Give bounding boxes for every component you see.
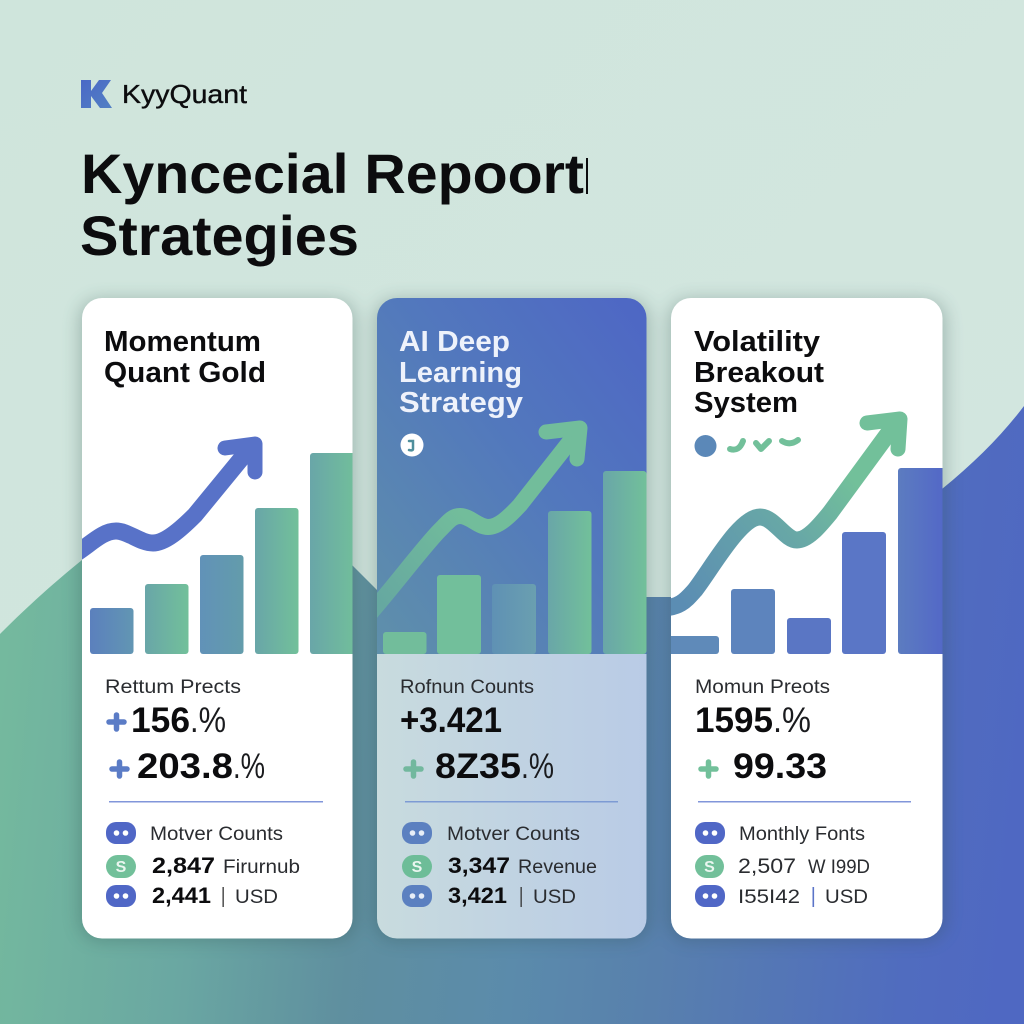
metric row: counts: Motver Counts xyxy=(150,824,283,845)
panel: momentum quant gold xyxy=(72,298,358,938)
stat: second value xyxy=(406,747,554,786)
panel: volatility breakout system xyxy=(660,298,948,938)
metric row: usd: USD xyxy=(235,887,278,908)
bar chart xyxy=(383,471,646,654)
metric row: firurnub: Firurnub xyxy=(223,857,300,878)
icon: badge xyxy=(400,434,424,456)
title: Kyncecial Repoort xyxy=(81,142,584,205)
metric row: w i99d xyxy=(695,855,870,878)
stat: first value xyxy=(695,701,811,740)
icon: dot and squiggles xyxy=(694,435,798,457)
metric row: usd xyxy=(106,883,278,908)
metric row: revenue: Revenue xyxy=(518,857,597,878)
stat label: Rofnun Counts xyxy=(400,677,534,698)
title: Strategies xyxy=(80,204,359,267)
stat label: Momun Preots xyxy=(695,677,830,698)
metric row: usd: 3,421 xyxy=(448,883,507,908)
metric row: usd xyxy=(695,885,868,908)
metric row: usd: I55I42 xyxy=(738,887,800,908)
card shadows xyxy=(80,300,945,940)
stat: second value: .% xyxy=(521,747,554,786)
card heading xyxy=(694,326,824,419)
arrow: rising trend xyxy=(368,428,580,616)
icon: K logo mark xyxy=(81,80,112,108)
panel: ai deep learning strategy xyxy=(368,298,647,939)
metric row: counts xyxy=(402,822,580,845)
metric row: firurnub: 2,847 xyxy=(152,853,215,878)
metric row: w i99d: 2,507 xyxy=(738,855,796,878)
bar chart xyxy=(90,453,358,654)
stat: first value: +3.421 xyxy=(400,701,502,740)
card heading: Quant Gold xyxy=(104,357,266,389)
logo xyxy=(81,79,248,109)
metric row: w i99d: W I99D xyxy=(808,857,870,878)
card heading: Breakout xyxy=(694,357,824,389)
metric row: monthly fonts xyxy=(695,822,865,845)
stat: second value xyxy=(112,747,265,786)
stat: second value: 203.8 xyxy=(137,747,233,786)
metric row: firurnub xyxy=(106,853,300,878)
metric row: usd: USD xyxy=(825,887,868,908)
arrow: rising trend xyxy=(72,444,255,556)
stat: first value: 156 xyxy=(131,701,190,740)
stat: second value: 8Z35 xyxy=(435,747,521,786)
stat: second value: 99.33 xyxy=(733,747,827,786)
metric row: counts: Motver Counts xyxy=(447,824,580,845)
card heading xyxy=(104,326,266,389)
card heading: AI Deep xyxy=(399,326,510,358)
background wave xyxy=(0,406,1024,1024)
stat: first value: .% xyxy=(190,701,226,740)
stat label: Rettum Prects xyxy=(105,677,241,698)
bar chart xyxy=(660,468,948,654)
metric row: revenue xyxy=(402,853,597,878)
card heading: System xyxy=(694,387,798,419)
card heading xyxy=(399,326,523,419)
metric row: revenue: 3,347 xyxy=(448,853,510,878)
metric row: monthly fonts: Monthly Fonts xyxy=(739,824,865,845)
metric row: w i99d: S xyxy=(704,859,715,876)
stat: first value: 1595 xyxy=(695,701,773,740)
arrow: rising trend xyxy=(660,419,900,608)
card heading: Learning xyxy=(399,357,522,389)
metric row: usd: 2,441 xyxy=(152,883,211,908)
stat: second value: .% xyxy=(233,747,265,786)
metric row: usd: USD xyxy=(533,887,576,908)
title xyxy=(80,142,588,267)
stat: second value xyxy=(701,747,827,786)
metric row: usd xyxy=(402,883,576,908)
stat: first value xyxy=(109,701,226,740)
card heading: Strategy xyxy=(399,387,523,419)
stat: first value: .% xyxy=(773,701,811,740)
metric row: counts xyxy=(106,822,283,845)
card heading: Volatility xyxy=(694,326,820,358)
card heading: Momentum xyxy=(104,326,261,358)
metric row: firurnub: S xyxy=(116,859,127,876)
brand name: KyyQuant xyxy=(122,79,248,109)
metric row: revenue: S xyxy=(412,859,423,876)
